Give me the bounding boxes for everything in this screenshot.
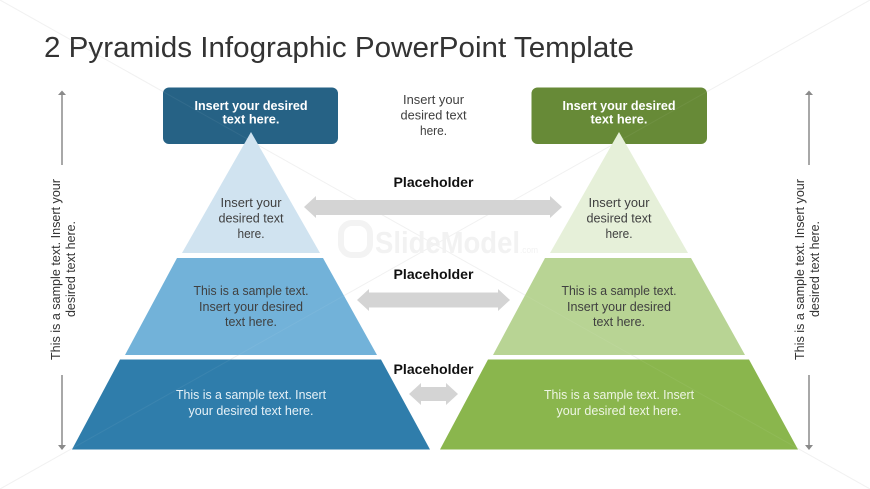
right pyramid tier 1 [550, 132, 688, 253]
left pyramid [72, 132, 430, 450]
double arrow 2 [357, 289, 510, 311]
center top text: desired text [400, 108, 467, 122]
right vertical text: This is a sample text. Insert your [793, 179, 807, 360]
left header box: Insert your desired [194, 99, 308, 113]
right pyramid tier 2 [493, 258, 745, 355]
left pyramid tier 2: Insert your desired [199, 300, 303, 314]
left vertical arrow down [58, 375, 66, 450]
right pyramid tier 2: This is a sample text. [562, 284, 676, 298]
right pyramid tier 1: desired text [586, 212, 652, 226]
left pyramid tier 3: This is a sample text. Insert [176, 388, 327, 402]
left pyramid tier 3: your desired text here. [188, 404, 314, 418]
right pyramid tier 1: here. [606, 227, 632, 241]
right pyramid tier 2: text here. [593, 315, 645, 329]
right pyramid tier 3: This is a sample text. Insert [544, 388, 695, 402]
double arrow 3 [409, 383, 458, 405]
left pyramid tier 1 [182, 132, 320, 253]
right pyramid tier 3 [440, 360, 798, 450]
left pyramid tier 2 [125, 258, 377, 355]
right vertical arrow down [805, 375, 813, 450]
title: 2 Pyramids Infographic PowerPoint Template [44, 32, 634, 64]
right pyramid [440, 132, 798, 450]
right header box: Insert your desired [562, 99, 676, 113]
right vertical arrow up [805, 90, 813, 165]
left pyramid tier 1: here. [238, 227, 264, 241]
right vertical text [793, 179, 822, 360]
right header box: text here. [590, 112, 648, 126]
placeholder label 3: Placeholder [394, 361, 474, 377]
left vertical arrow up [58, 90, 66, 165]
watermark: SlideModel: SlideModel [375, 225, 520, 260]
left vertical text [49, 179, 78, 360]
placeholder label 2: Placeholder [394, 266, 474, 282]
double arrow 1 [304, 196, 562, 218]
left vertical text: This is a sample text. Insert your [49, 179, 63, 360]
left header box: text here. [222, 112, 280, 126]
right pyramid tier 2: Insert your desired [567, 300, 671, 314]
left pyramid tier 1: Insert your [220, 196, 282, 210]
right pyramid tier 3: your desired text here. [556, 404, 682, 418]
center top text [400, 93, 467, 138]
placeholder label 1: Placeholder [394, 174, 474, 190]
left vertical text: desired text here. [64, 221, 78, 317]
left pyramid tier 2: This is a sample text. [194, 284, 308, 298]
center top text: Insert your [403, 93, 464, 107]
right header box [532, 88, 707, 144]
right vertical text: desired text here. [808, 221, 822, 317]
right pyramid tier 1: Insert your [588, 196, 650, 210]
left pyramid tier 1: desired text [218, 212, 284, 226]
left header box [163, 88, 338, 144]
center top text: here. [420, 124, 447, 138]
left pyramid tier 3 [72, 360, 430, 450]
watermark: SlideModel: .com [520, 245, 538, 255]
left pyramid tier 2: text here. [225, 315, 277, 329]
